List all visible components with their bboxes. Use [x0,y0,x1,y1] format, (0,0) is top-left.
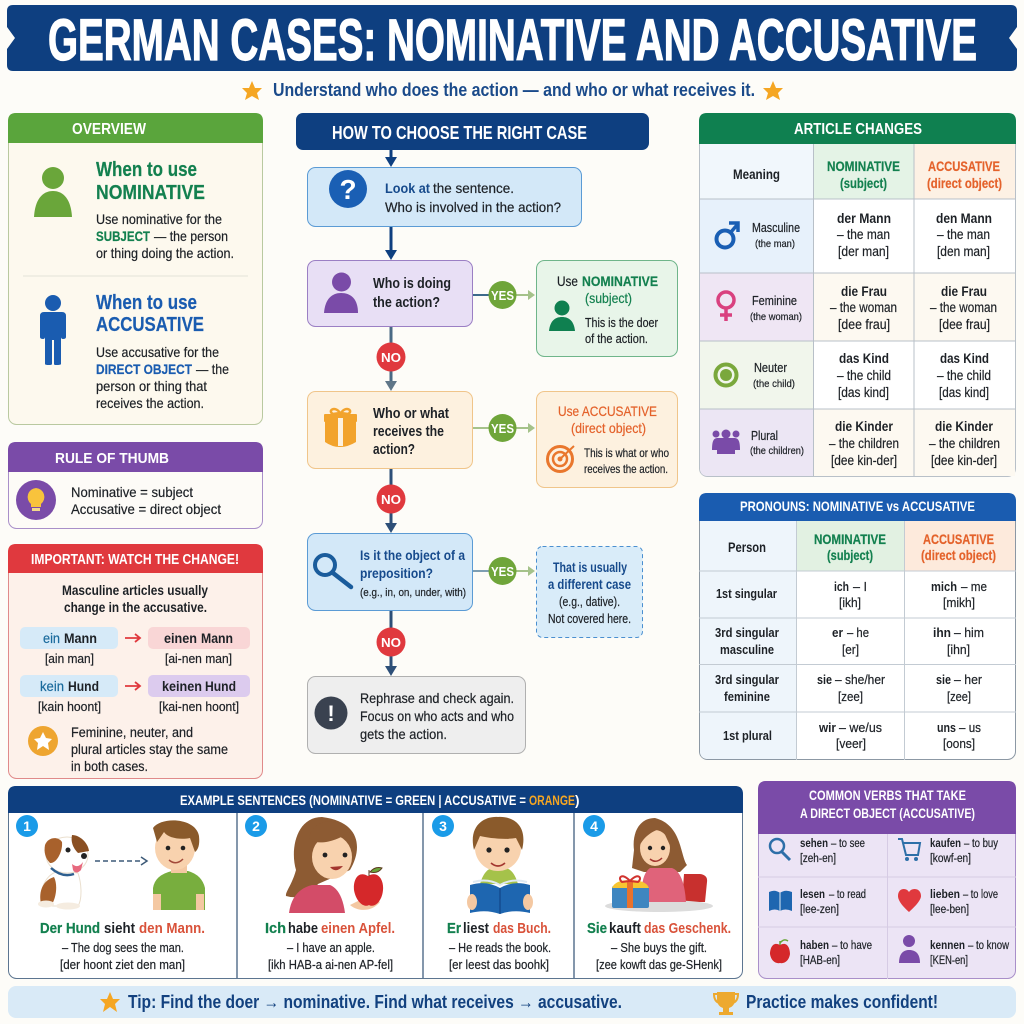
pronoun column headings: NOMINATIVE [814,532,886,547]
row: masculine: Masculine [752,221,800,235]
step: object of a preposition: Is it the object of a [360,547,465,563]
nominative explanation: or thing doing the action. [96,245,234,261]
result: use accusative: Use ACCUSATIVE [558,403,657,419]
row: plural: [dee kin-der] [931,453,997,468]
row: plural [712,419,1000,468]
examples header: EXAMPLE SENTENCES (NOMINATIVE = GREEN | ACCUSATIVE = [180,793,526,808]
yes connector 2 [473,414,535,442]
example 4 [583,815,731,972]
important header: IMPORTANT: WATCH THE CHANGE! [31,552,239,568]
row: plural: – the children [829,436,899,451]
row: masculine: der Mann [837,211,891,226]
step: rephrase: Rephrase and check again. [360,690,514,706]
step: object of a preposition: preposition? [360,565,433,581]
sentence 3: das Buch. [493,921,551,937]
note text: Feminine, neuter, and [71,725,193,740]
rule of thumb header [8,442,263,472]
row: masculine: [der man] [838,244,889,259]
result: use nominative [536,260,678,356]
result: different case: That is usually [553,560,627,575]
tip text: Tip: Find the doer → nominative. Find what receives → accusative. [128,992,622,1012]
example: ein Mann to einen Mann: [ai-nen man] [165,652,232,666]
row: 3rd singular feminine: [zee] [947,689,971,704]
yes connector 2: YES [491,421,514,436]
sentence 4: kauft [609,921,641,937]
row: 3rd singular masculine: ihn [933,625,951,640]
row: 1st plural: – us [959,720,981,735]
sentence 4: das Geschenk. [644,921,731,937]
pronoun column headings: (subject) [827,548,873,563]
row: masculine: – the man [837,227,890,242]
example: kein Hund to keinen Hund: [kai-nen hoont] [159,700,239,714]
panel: pronouns table [699,493,1016,760]
result: use nominative: Use [557,273,578,289]
intro text [62,582,208,615]
icon: star badge [28,726,58,756]
row: 3rd singular masculine: – him [954,625,984,640]
step: who is doing the action: Who is doing [373,276,451,292]
row: feminine: die Frau [941,284,987,299]
verb: kennen [899,935,1010,967]
examples header [8,786,743,813]
row: 1st singular: 1st singular [716,586,777,601]
step: rephrase: Focus on who acts and who [360,708,514,724]
panel: important watch the change [8,544,263,778]
row: masculine: – the man [937,227,990,242]
result: use accusative: receives the action. [584,462,668,476]
subtitle: Understand who does the action — and who or what receives it. [273,80,755,100]
verbs header: COMMON VERBS THAT TAKE [809,788,966,803]
row: 3rd singular feminine: sie [936,672,951,687]
verb: kennen: – to know [968,940,1010,952]
sentence 3: Er [447,921,461,937]
step: who or what receives: receives the [373,424,444,440]
article changes header: ARTICLE CHANGES [794,121,922,138]
result: different case: (e.g., dative). [559,594,620,609]
row: feminine [718,284,997,332]
example 4: 4 [590,818,598,834]
step: look at the sentence: Look at [385,180,430,196]
example: kein Hund to keinen Hund: keinen [162,678,202,694]
example: kein Hund to keinen Hund: Hund [68,678,99,694]
row: masculine [716,211,992,259]
sentence 2 [265,921,395,972]
accusative explanation: person or thing that [96,378,207,394]
result: use accusative: This is what or who [584,446,669,460]
nominative explanation: NOMINATIVE [96,182,205,204]
panel: flowchart [296,113,678,754]
no connector 1 [376,327,406,391]
row: masculine: [den man] [937,244,990,259]
illustration: dog looking at man [38,835,89,910]
table column headings: ACCUSATIVE [928,159,1000,174]
nominative explanation: When to use [96,159,197,181]
pronouns header [699,493,1016,521]
sentence 1: – The dog sees the man. [62,941,184,955]
row: 3rd singular masculine: – he [847,625,869,640]
sentence 2: habe [288,921,318,937]
note text: in both cases. [71,759,148,774]
row: neuter: [das kind] [838,385,889,400]
example: kein Hund to keinen Hund [20,675,250,714]
no connector 2: NO [381,492,401,507]
table column headings [733,159,1002,191]
sentence 1: den Mann. [139,921,205,937]
no connector 1: NO [381,350,401,365]
row: plural: die Kinder [935,419,994,434]
result: use nominative: (subject) [585,290,632,306]
verb: kaufen: [kowf-en] [930,853,971,865]
row: 1st plural: [oons] [943,736,975,751]
row: feminine: – the woman [830,300,897,315]
example: kein Hund to keinen Hund: Hund [205,678,236,694]
nominative explanation: SUBJECT [96,228,150,244]
sentence 2: [ikh HAB-a ai-nen AP-fel] [268,958,393,972]
row: 3rd singular masculine: masculine [720,642,774,657]
row: 3rd singular feminine: [zee] [838,689,863,704]
row: 1st plural: – we/us [839,720,882,735]
step: rephrase: ! [327,701,335,726]
article changes header [699,113,1016,144]
table column headings: Meaning [733,166,780,182]
flowchart heading: HOW TO CHOOSE THE RIGHT CASE [332,123,587,143]
step: look at the sentence [308,168,582,226]
row: 1st plural: uns [937,720,956,735]
sentence 4 [587,921,731,972]
step: object of a preposition: (e.g., in, on, under, with) [360,587,466,599]
row: 3rd singular feminine [715,672,983,704]
important header [8,544,263,573]
row: 1st singular: mich [931,579,957,594]
tip bar [8,986,1016,1018]
sentence 4: – She buys the gift. [611,941,707,955]
yes connector 1 [473,281,535,309]
step: look at the sentence: Who is involved in the action? [385,199,561,215]
result: different case [536,546,642,638]
pronoun column headings [728,532,996,563]
rule text [71,484,221,517]
example: kein Hund to keinen Hund: [kain hoont] [38,700,101,714]
panel: overview [8,113,263,424]
verb: sehen: sehen [800,838,828,850]
verb: lesen: lesen [800,889,825,901]
column tints [700,144,1015,476]
row: 3rd singular masculine [715,625,984,657]
example 3: 3 [439,818,447,834]
row: feminine: Feminine [752,294,797,308]
example 2: 2 [252,818,260,834]
sentence 2: Ich [265,921,286,937]
verb: lieben: lieben [930,889,960,901]
arrow: start [385,150,397,167]
no connector 2 [376,469,406,533]
row: feminine: (the woman) [750,311,802,323]
verbs header: A DIRECT OBJECT (ACCUSATIVE) [800,806,975,821]
result: use accusative [536,392,678,488]
verb: lesen [769,889,866,916]
accusative explanation: receives the action. [96,395,204,411]
panel: common verbs [758,781,1016,979]
step: who or what receives: Who or what [373,406,449,422]
icon: trophy [714,992,738,1015]
rule text: Nominative = subject [71,484,193,500]
row: feminine: [dee frau] [939,317,990,332]
step: rephrase [308,676,526,754]
sentence 1: Der Hund [40,921,100,937]
row: 1st singular [716,579,987,610]
row: 1st plural: [veer] [836,736,866,751]
rule of thumb header: RULE OF THUMB [55,450,169,467]
examples header: ) [575,793,580,808]
row: feminine: [dee frau] [838,317,890,332]
illustration: girl with apple [286,817,383,913]
accusative explanation: — the [196,361,229,377]
accusative explanation: ACCUSATIVE [96,314,204,336]
step: who or what receives: action? [373,442,415,458]
row: neuter: [das kind] [939,385,989,400]
verb: lieben [898,889,998,916]
accusative explanation: Use accusative for the [96,344,219,360]
step: who is doing the action [308,260,472,326]
panel: article changes table [699,113,1016,477]
intro text: Masculine articles usually [62,582,208,598]
panel: example sentences [8,786,743,979]
step: who or what receives [308,392,472,468]
row: neuter: – the child [837,368,891,383]
pronouns header: PRONOUNS: NOMINATIVE vs ACCUSATIVE [740,498,975,514]
example 1 [16,815,205,972]
rule text: Accusative = direct object [71,501,221,517]
panel: rule of thumb [8,442,263,528]
table column headings: NOMINATIVE [827,159,900,174]
icon: green person [34,167,72,217]
verb: haben: [HAB-en] [800,955,840,967]
arrow: dog to man [95,857,147,865]
row: 1st plural: wir [818,720,836,735]
nominative explanation: Use nominative for the [96,211,222,227]
examples header: ORANGE [529,793,575,808]
row: feminine: die Frau [841,284,887,299]
example: ein Mann to einen Mann: einen [164,630,197,646]
result: use nominative: of the action. [585,331,648,346]
verb: sehen: – to see [831,838,865,850]
row: 3rd singular feminine: sie [817,672,832,687]
step: who is doing the action: the action? [373,295,440,311]
overview header [8,113,263,143]
verb: haben: haben [800,940,829,952]
example 1: 1 [23,818,31,834]
nominative explanation: — the person [154,228,228,244]
example: ein Mann to einen Mann: Mann [201,630,233,646]
sentence 2: einen Apfel. [321,921,395,937]
practice text: Practice makes confident! [746,992,938,1012]
no connector 3 [376,611,406,676]
no connector 3: NO [381,635,401,650]
icon: light bulb [16,480,56,520]
verb: haben [770,940,872,967]
example: ein Mann to einen Mann: Mann [64,630,97,646]
result: use accusative: (direct object) [571,420,646,436]
row: 3rd singular masculine: [er] [842,642,859,657]
row: 1st singular: ich [834,579,849,594]
flowchart heading [296,113,649,150]
row: 3rd singular feminine: 3rd singular [715,672,779,687]
verb: sehen [770,838,865,865]
result: use nominative: This is the doer [585,315,659,330]
sentence 1: [der hoont ziet den man] [60,958,185,972]
step: look at the sentence: ? [339,174,357,205]
step: look at the sentence: the sentence. [433,180,514,196]
arrow: to who is doing [385,227,397,260]
row: 1st singular: – me [961,579,987,594]
overview header: OVERVIEW [72,121,147,138]
step: rephrase: gets the action. [360,726,447,742]
example: kein Hund to keinen Hund: kein [40,678,64,694]
row: 1st plural: 1st plural [723,728,772,743]
accusative explanation [96,292,229,411]
verb: kaufen [898,838,998,865]
row: plural: – the children [929,436,1000,451]
row: plural: die Kinder [835,419,894,434]
row: 3rd singular feminine: feminine [724,689,770,704]
sentence 3: – He reads the book. [449,941,551,955]
row: masculine: (the man) [755,238,795,250]
example 2 [245,815,395,972]
row: neuter: – the child [937,368,991,383]
yes connector 1: YES [491,288,514,303]
verb: lieben: – to love [963,889,998,901]
row: 1st plural [723,720,981,751]
example: ein Mann to einen Mann: [ain man] [45,652,94,666]
verb: kennen: kennen [930,940,965,952]
row: 1st singular: [ikh] [839,595,861,610]
sentence 3: liest [463,921,489,937]
note text: plural articles stay the same [71,742,228,757]
row: plural: (the children) [750,445,804,457]
row: masculine: den Mann [936,211,992,226]
row: plural: Plural [751,429,778,443]
sentence 1 [40,921,205,972]
pronoun column headings: (direct object) [921,548,996,563]
table column headings: (direct object) [927,176,1002,191]
yes connector 3 [473,557,535,585]
verb: kaufen: – to buy [964,838,998,850]
illustration: man [153,820,205,910]
row: neuter [716,351,991,400]
result: different case: a different case [548,577,631,592]
pronoun column headings: Person [728,540,766,555]
illustration: girl with gift [605,818,713,912]
verb: lieben: [lee-ben] [930,904,969,916]
example 3 [432,815,551,972]
result: different case: Not covered here. [548,611,631,626]
intro text: change in the accusative. [64,599,207,615]
example: ein Mann to einen Mann [20,627,250,666]
verb: haben: – to have [832,940,872,952]
sentence 4: [zee kowft das ge-SHenk] [596,958,722,972]
icon: star [100,992,120,1012]
illustration: boy reading [467,817,533,914]
sentence 1: sieht [104,921,135,937]
row: neuter: das Kind [940,351,989,366]
pronoun tints [700,521,1015,759]
verb: kaufen: kaufen [930,838,961,850]
nominative explanation [96,159,234,261]
verb: kennen: [KEN-en] [930,955,968,967]
row: 1st singular: – I [853,579,867,594]
result: use nominative: NOMINATIVE [582,273,658,289]
verb: sehen: [zeh-en] [800,853,836,865]
row: 3rd singular feminine: – her [954,672,983,687]
row: neuter: (the child) [753,378,795,390]
sentence 3: [er leest das boohk] [449,958,549,972]
table column headings: (subject) [840,176,887,191]
row: plural: [dee kin-der] [831,453,897,468]
yes connector 3: YES [491,564,514,579]
pronoun column headings: ACCUSATIVE [923,532,994,547]
icon: blue person [40,295,66,365]
note text [71,725,228,774]
row: neuter: Neuter [754,361,787,375]
verb: lesen: – to read [829,889,866,901]
row: 1st singular: [mikh] [943,595,975,610]
step: object of a preposition [308,534,472,610]
row: 3rd singular masculine: 3rd singular [715,625,779,640]
row: neuter: das Kind [839,351,889,366]
row: 3rd singular feminine: – she/her [835,672,886,687]
sentence 3 [447,921,551,972]
row: 3rd singular masculine: [ihn] [947,642,970,657]
verb: lesen: [lee-zen] [800,904,839,916]
accusative explanation: When to use [96,292,197,314]
accusative explanation: DIRECT OBJECT [96,361,192,377]
sentence 2: – I have an apple. [287,941,375,955]
sentence 4: Sie [587,921,607,937]
row: 3rd singular masculine: er [832,625,843,640]
example: ein Mann to einen Mann: ein [43,630,60,646]
verbs header [758,781,1016,834]
row: feminine: – the woman [930,300,997,315]
